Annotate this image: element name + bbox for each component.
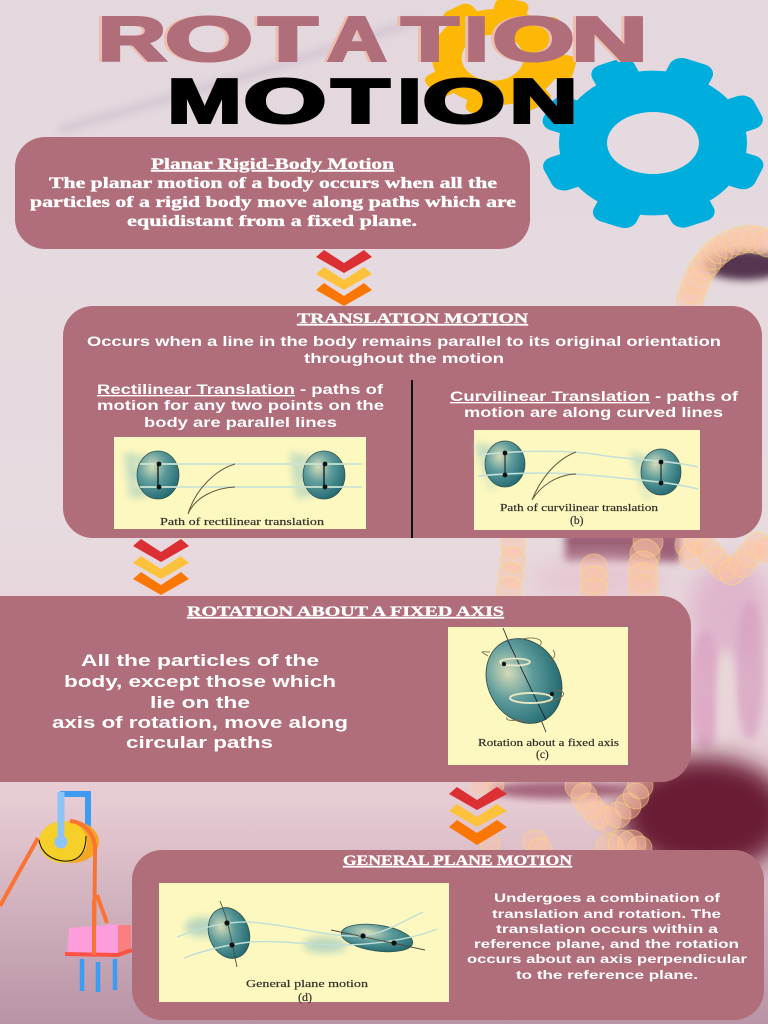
diagram: rectilinear translation: Path of rectilinear translation bbox=[160, 517, 325, 528]
title shadow: rotation: N bbox=[568, 6, 644, 74]
arrow: chevrons 2 bbox=[133, 539, 189, 595]
panel: rotation about a fixed axis bbox=[0, 596, 691, 782]
icon: pulley and block bbox=[0, 792, 132, 992]
title shadow: rotation: O bbox=[162, 6, 250, 74]
text block: rotation definition: body, except those which bbox=[64, 672, 336, 691]
title word: rotation: A bbox=[328, 6, 386, 74]
text block: translation definition bbox=[87, 334, 721, 366]
panel: planar rigid-body motion bbox=[15, 137, 530, 249]
heading: planar rigid-body motion: Planar Rigid-Body Motion bbox=[151, 156, 395, 173]
title word: rotation: T bbox=[402, 6, 459, 74]
bokeh: chains of lights bbox=[471, 225, 768, 862]
text block: rotation definition: axis of rotation, move along bbox=[52, 713, 348, 732]
title word: rotation: I bbox=[464, 6, 488, 74]
heading: general plane motion: GENERAL PLANE MOTION bbox=[343, 853, 573, 869]
title word: motion: I bbox=[398, 68, 422, 136]
text block: planar definition: The planar motion of a body occurs when all the bbox=[49, 175, 497, 192]
arrow: chevrons 1 bbox=[316, 250, 372, 306]
diagram: general plane motion: (d) bbox=[298, 990, 312, 1004]
text block: rectilinear translation: body are parallel lines bbox=[144, 415, 337, 430]
text block: planar definition bbox=[30, 175, 516, 230]
text block: curvilinear translation bbox=[450, 389, 739, 420]
text block: rotation definition: lie on the bbox=[150, 693, 250, 712]
text block: general plane definition: translation occurs within a bbox=[496, 922, 718, 936]
text block: rotation definition: All the particles of the bbox=[81, 651, 319, 670]
title word: motion bbox=[168, 68, 578, 136]
title word: rotation: O bbox=[165, 6, 253, 74]
diagram: curvilinear translation: (b) bbox=[570, 515, 584, 527]
panel: translation motion bbox=[63, 306, 762, 538]
text block: curvilinear translation: motion are along curved lines bbox=[464, 405, 723, 420]
title shadow: rotation: O bbox=[490, 6, 572, 74]
diagram: rectilinear translation bbox=[114, 437, 366, 529]
text block: general plane definition: to the reference plane. bbox=[516, 968, 698, 982]
title shadow: rotation: A bbox=[324, 6, 384, 74]
text block: rectilinear translation: motion for any two points on the bbox=[97, 398, 385, 413]
text block: curvilinear translation: Curvilinear Translation - paths of bbox=[450, 389, 739, 404]
title word: rotation: R bbox=[98, 6, 166, 74]
text block: rectilinear translation: Rectilinear Translation - paths of bbox=[97, 382, 384, 397]
diagram: curvilinear translation: Path of curvilinear translation bbox=[500, 503, 659, 514]
text block: general plane definition: reference plane, and the rotation bbox=[474, 937, 739, 951]
text block: general plane definition: Undergoes a combination of bbox=[494, 891, 721, 905]
title word: rotation: T bbox=[258, 6, 318, 74]
title shadow: rotation: T bbox=[256, 6, 315, 74]
text block: general plane definition: occurs about an axis perpendicular bbox=[467, 952, 747, 966]
text block: translation definition: Occurs when a line in the body remains parallel to its original orientation bbox=[87, 334, 721, 349]
text block: general plane definition: translation and rotation. The bbox=[492, 907, 721, 921]
diagram: rotation about fixed axis: (c) bbox=[536, 749, 549, 761]
text block: general plane definition bbox=[467, 891, 747, 982]
title shadow: rotation: R bbox=[95, 6, 163, 74]
icon: blue gear hole bbox=[607, 112, 699, 174]
diagram: rotation about fixed axis: Rotation about a fixed axis bbox=[478, 738, 619, 749]
title shadow: rotation: T bbox=[398, 6, 456, 74]
diagram: general plane motion bbox=[159, 883, 449, 1004]
diagram: rotation about fixed axis bbox=[448, 625, 628, 765]
arrow: chevrons 3 bbox=[449, 787, 507, 845]
heading: translation motion: TRANSLATION MOTION bbox=[297, 311, 528, 327]
title word: rotation bbox=[98, 6, 648, 74]
text block: rotation definition: circular paths bbox=[126, 733, 273, 752]
title shadow: rotation: I bbox=[462, 6, 486, 74]
text block: planar definition: equidistant from a fixed plane. bbox=[127, 213, 417, 230]
panel: general plane motion bbox=[132, 850, 764, 1020]
title word: motion: T bbox=[332, 68, 390, 136]
text block: planar definition: particles of a rigid body move along paths which are bbox=[30, 194, 516, 211]
title word: motion: O bbox=[422, 68, 506, 136]
heading: rotation about a fixed axis: ROTATION ABOUT A FIXED AXIS bbox=[187, 604, 504, 620]
title word: motion: M bbox=[168, 68, 242, 136]
title word: motion: O bbox=[244, 68, 326, 136]
diagram: curvilinear translation bbox=[474, 430, 700, 530]
icon: yellow gear bbox=[403, 0, 591, 126]
text block: rotation definition bbox=[52, 651, 348, 752]
text block: rectilinear translation bbox=[97, 382, 385, 430]
title word: rotation: O bbox=[492, 6, 574, 74]
title bbox=[95, 6, 648, 136]
title word: motion: N bbox=[510, 68, 578, 136]
title word: rotation: N bbox=[572, 6, 648, 74]
title shadow: rotation bbox=[95, 6, 644, 74]
icon: blue gear bbox=[505, 29, 768, 257]
diagram: general plane motion: General plane motion bbox=[246, 978, 369, 990]
text block: translation definition: throughout the motion bbox=[304, 351, 504, 366]
